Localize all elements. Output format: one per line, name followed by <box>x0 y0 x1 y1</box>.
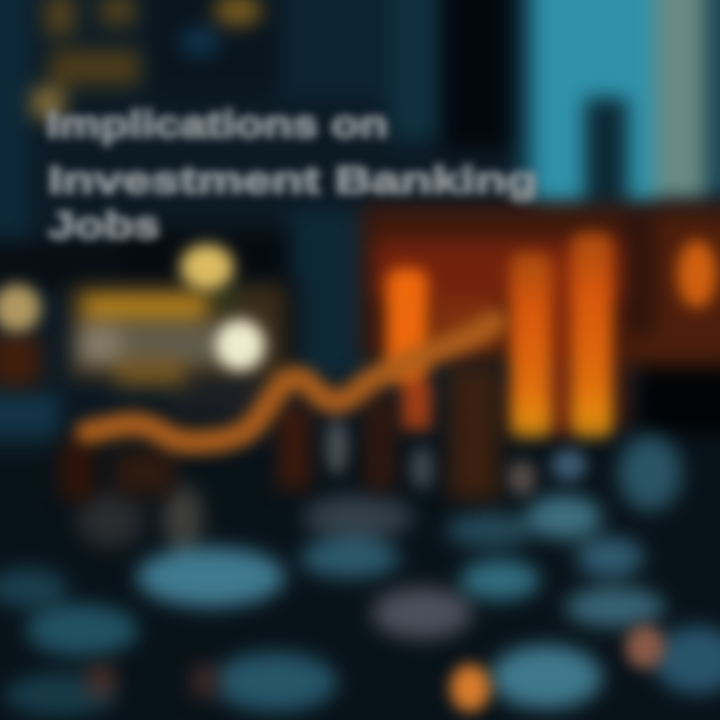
title: Investment Banking <box>48 160 538 202</box>
lower floor <box>0 365 720 720</box>
title: Jobs <box>48 205 160 247</box>
title: Implications on <box>46 104 388 146</box>
blue discs <box>0 435 720 717</box>
background skyline <box>0 0 720 495</box>
gold lights upper left <box>32 0 262 118</box>
orange building <box>362 205 720 442</box>
gold desk cluster <box>0 244 285 386</box>
glowing orbs <box>0 244 265 371</box>
grey highlights between bars <box>326 419 587 496</box>
title <box>46 104 538 247</box>
small orange lights <box>450 625 665 712</box>
trend line <box>87 322 495 442</box>
orange pillars <box>386 232 717 442</box>
brown bars <box>60 365 500 697</box>
